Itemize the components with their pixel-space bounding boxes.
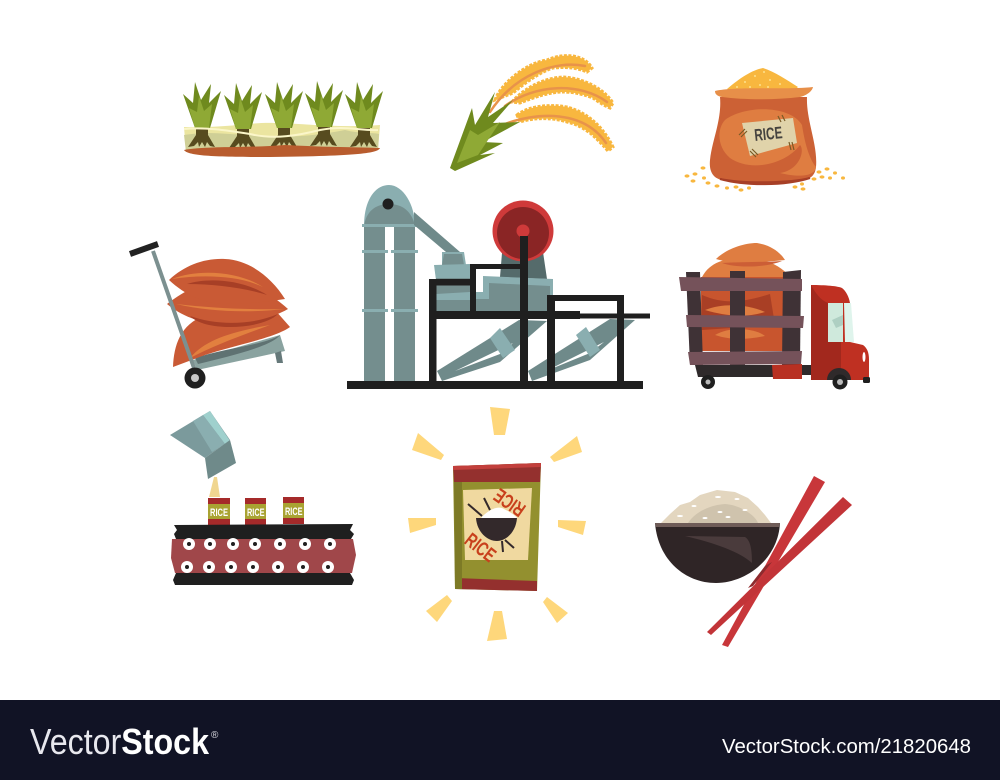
conveyor belt bbox=[171, 524, 356, 585]
sack body bbox=[710, 97, 816, 183]
package: RICE bbox=[460, 529, 500, 567]
icon: rice package with shine bbox=[408, 407, 586, 641]
chopsticks bbox=[707, 476, 852, 647]
icon: rice seedlings in soil bbox=[183, 81, 383, 157]
icon: rice processing machine bbox=[347, 185, 650, 389]
elevator columns bbox=[362, 185, 460, 382]
registered mark: ® bbox=[211, 730, 219, 741]
cart platform bbox=[193, 335, 285, 370]
cart handle bbox=[153, 251, 194, 368]
sacks in crate bbox=[701, 243, 790, 351]
truck wheels bbox=[701, 368, 851, 390]
sack label bbox=[739, 115, 797, 157]
crate slats bbox=[679, 277, 804, 365]
sack rim bbox=[715, 87, 813, 99]
chute clamps bbox=[490, 328, 515, 358]
soil bbox=[184, 145, 380, 157]
falling rice bbox=[209, 477, 220, 497]
panicles bbox=[495, 56, 613, 151]
funnel bbox=[170, 411, 236, 479]
rice packets: RICE bbox=[210, 507, 228, 519]
icon: hand cart with rice sacks bbox=[130, 244, 290, 388]
bowl bbox=[655, 523, 780, 583]
sack label: RICE bbox=[753, 123, 783, 145]
water layer bbox=[184, 123, 380, 152]
black frame bbox=[347, 236, 650, 389]
crate uprights bbox=[686, 270, 801, 367]
icon: rice stalk with panicles bbox=[450, 56, 613, 171]
rice packets: RICE bbox=[247, 507, 264, 519]
brand logo: VectorStock bbox=[30, 721, 210, 762]
package bbox=[453, 463, 541, 591]
scattered grains bbox=[684, 166, 845, 192]
icon: filling line with conveyor bbox=[170, 411, 356, 585]
icon: rice bowl with chopsticks bbox=[655, 476, 852, 647]
truck cab bbox=[772, 285, 870, 383]
leaves bbox=[450, 92, 520, 171]
rice packets: RICE bbox=[285, 506, 302, 518]
icon: open rice sack bbox=[684, 68, 845, 192]
rice pile bbox=[727, 68, 798, 94]
cooked rice bbox=[661, 490, 771, 523]
red flywheel bbox=[492, 200, 554, 262]
drive housing bbox=[500, 252, 547, 279]
package: RICE bbox=[490, 484, 530, 520]
hopper bbox=[434, 252, 470, 311]
sorting chutes bbox=[437, 319, 635, 381]
bowl emblem bbox=[468, 498, 517, 552]
image id: VectorStock.com/21820648 bbox=[722, 736, 971, 758]
plant row bbox=[183, 81, 383, 148]
footer bar bbox=[0, 700, 1000, 780]
rice packets bbox=[208, 497, 304, 525]
shine rays bbox=[408, 407, 586, 641]
sack stack bbox=[167, 259, 290, 367]
icon: truck carrying rice sacks bbox=[679, 243, 870, 390]
cart wheel bbox=[184, 368, 206, 388]
